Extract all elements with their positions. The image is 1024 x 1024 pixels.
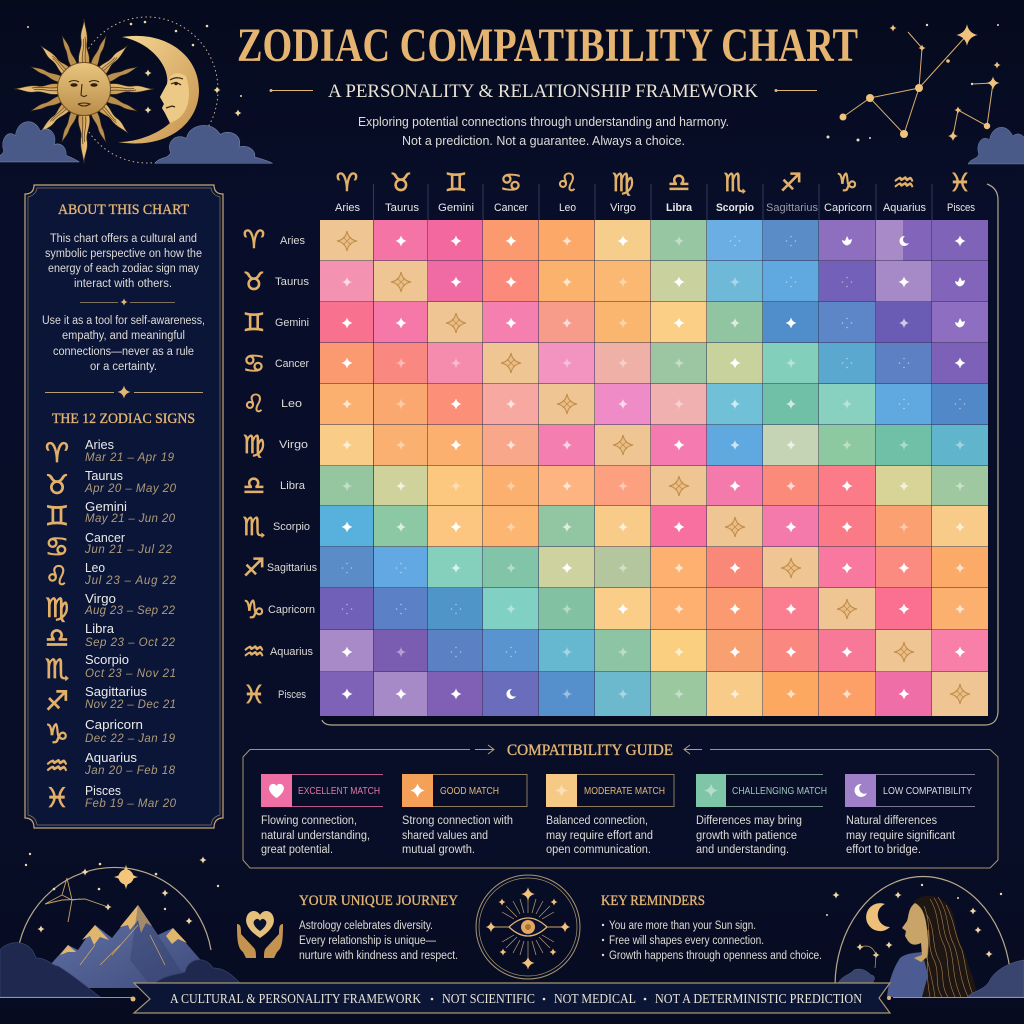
icon: hands holding heart	[237, 911, 283, 958]
sign list	[45, 438, 177, 814]
row headers: ♌︎	[243, 389, 265, 418]
row: Gemini	[320, 302, 988, 342]
row headers: Sagittarius	[267, 562, 317, 574]
legend: low compatibility: LOW COMPATIBILITY	[883, 786, 972, 797]
row headers: Aquarius	[270, 646, 313, 658]
column headers: ♍︎	[612, 168, 634, 197]
hair	[913, 896, 977, 997]
row: Libra	[320, 466, 988, 506]
row: Virgo	[320, 425, 988, 466]
text block: about: symbolic perspective on how the	[45, 248, 202, 260]
row headers: Virgo	[279, 439, 308, 451]
text block: reminders: You are more than your Sun sign.	[609, 920, 756, 932]
column headers: Capricorn	[824, 202, 872, 214]
illustration: constellation	[826, 24, 1001, 141]
column headers: ♑︎	[836, 168, 858, 197]
column headers: Libra	[666, 202, 693, 214]
sign list: Nov 22 – Dec 21	[85, 699, 176, 711]
sign list: Pisces	[85, 784, 121, 798]
face	[902, 903, 928, 962]
text block: about: energy of each zodiac sign may	[48, 263, 199, 275]
sign list: Gemini	[85, 500, 127, 514]
legend: excellent match: natural understanding,	[261, 830, 370, 842]
text block: journey: Every relationship is unique—	[299, 935, 436, 947]
column headers	[335, 168, 975, 220]
row headers: ♈︎	[243, 225, 265, 254]
column headers: ♏︎	[724, 168, 746, 197]
row headers: ♓︎	[243, 680, 265, 709]
column headers: Gemini	[438, 202, 474, 214]
sign list: Cancer	[85, 531, 125, 545]
sign list: ♏︎	[45, 654, 69, 685]
body	[887, 952, 928, 997]
column headers: Aquarius	[883, 202, 926, 214]
sign list: ♈︎	[45, 438, 69, 469]
row headers: ♑︎	[243, 595, 265, 624]
stars by the moon	[27, 21, 242, 117]
column headers: Scorpio	[716, 202, 754, 214]
sign list: Jul 23 – Aug 22	[84, 575, 177, 587]
legend: good match: Strong connection with	[402, 815, 513, 827]
legend: low compatibility: Natural differences	[846, 815, 937, 827]
row: Aries	[320, 220, 988, 260]
row headers: Pisces	[278, 689, 306, 701]
text block: about: empathy, and meaningful	[62, 330, 185, 342]
text block: about: or a certainty.	[90, 361, 157, 373]
sun star	[114, 865, 138, 889]
panel: about and signs	[25, 185, 223, 828]
banner: A CULTURAL & PERSONALITY FRAMEWORK	[170, 991, 421, 1006]
sign list: ♍︎	[45, 593, 69, 624]
banner line left	[0, 996, 133, 998]
text block: journey: Astrology celebrates diversity.	[299, 920, 433, 932]
sign list: ♓︎	[45, 783, 69, 814]
sign list: ♉︎	[45, 470, 69, 501]
column headers: Aries	[335, 202, 360, 214]
legend: good match: GOOD MATCH	[440, 786, 499, 797]
clouds	[838, 960, 1024, 997]
illustration: mountains	[0, 853, 240, 997]
column headers: Leo	[559, 202, 576, 214]
column headers: Pisces	[947, 202, 975, 214]
sign list: Virgo	[85, 592, 116, 606]
sign list: Aquarius	[85, 751, 137, 765]
column headers: ♓︎	[949, 168, 971, 197]
heading: key reminders: KEY REMINDERS	[601, 893, 705, 909]
legend: good match: mutual growth.	[402, 844, 475, 856]
legend: challenging match: CHALLENGING MATCH	[732, 786, 827, 797]
legend: low compatibility: may require significant	[846, 830, 956, 842]
row headers: ♉︎	[243, 267, 265, 296]
sign list: Jun 21 – Jul 22	[84, 544, 173, 556]
row headers: Taurus	[275, 276, 309, 288]
legend: low compatibility: effort to bridge.	[846, 844, 921, 856]
row headers: ♋︎	[243, 349, 265, 378]
clouds	[0, 943, 240, 997]
sign list: ♒︎	[45, 751, 69, 782]
legend: excellent match: great potential.	[261, 844, 333, 856]
legend: good match	[402, 774, 527, 856]
sign list: Capricorn	[85, 718, 143, 732]
column headers: ♊︎	[445, 168, 467, 197]
sign list: Dec 22 – Jan 19	[85, 733, 176, 745]
text block: about: Use it as a tool for self-awareness,	[42, 315, 205, 327]
legend: challenging match: and understanding.	[696, 844, 789, 856]
legend: challenging match: Differences may bring	[696, 815, 802, 827]
row headers: ♎︎	[243, 471, 265, 500]
legend: moderate match: open communication.	[546, 844, 651, 856]
sign list: Mar 21 – Apr 19	[85, 452, 175, 464]
row headers: Libra	[280, 480, 306, 492]
sign list: ♎︎	[45, 623, 69, 654]
tagline: Exploring potential connections through understanding and harmony.	[358, 114, 729, 129]
banner line right	[893, 996, 1024, 998]
row headers: ♒︎	[243, 637, 265, 666]
legend: moderate match: MODERATE MATCH	[584, 786, 665, 797]
icon: sun	[14, 19, 154, 163]
constellation	[45, 878, 108, 922]
legend: moderate match: may require effort and	[546, 830, 653, 842]
sign list: Apr 20 – May 20	[84, 483, 177, 495]
legend: challenging match	[696, 774, 827, 856]
sign list: Taurus	[85, 469, 123, 483]
heading: the 12 zodiac signs: THE 12 ZODIAC SIGNS	[52, 411, 195, 427]
text block: journey	[299, 920, 458, 962]
row headers: ♊︎	[243, 308, 265, 337]
sign list: ♋︎	[45, 532, 69, 563]
column headers: ♋︎	[500, 168, 522, 197]
illustration: sun and moon	[14, 17, 242, 163]
legend: excellent match	[261, 774, 383, 856]
icon: crescent moon	[118, 36, 199, 143]
icon: eye emblem	[476, 875, 580, 979]
text block: about: interact with others.	[74, 278, 172, 290]
banner: NOT SCIENTIFIC	[442, 991, 535, 1006]
legend: moderate match: Balanced connection,	[546, 815, 648, 827]
row: Pisces	[320, 672, 988, 716]
row: Taurus	[320, 261, 988, 302]
text block: about	[42, 233, 205, 398]
column headers: Cancer	[494, 202, 528, 214]
sign list: Oct 23 – Nov 21	[85, 668, 176, 680]
sign list: Libra	[85, 622, 114, 636]
illustration: woman and moon	[826, 876, 1024, 997]
sign list: Feb 19 – Mar 20	[85, 798, 177, 810]
sign list: Sagittarius	[85, 685, 147, 699]
cloud centre	[155, 125, 273, 163]
column headers: Virgo	[610, 202, 636, 214]
row: Capricorn	[320, 588, 988, 630]
row headers: Leo	[281, 398, 302, 410]
row headers: Scorpio	[273, 521, 310, 533]
tagline: Not a prediction. Not a guarantee. Always a choice.	[402, 133, 685, 148]
column headers: ♐︎	[780, 168, 802, 197]
sign list: Jan 20 – Feb 18	[84, 765, 176, 777]
sign list: Aug 23 – Sep 22	[84, 605, 176, 617]
row headers: Cancer	[275, 358, 309, 370]
row: Leo	[320, 384, 988, 424]
text block: about: This chart offers a cultural and	[50, 233, 197, 245]
sign list: ♑︎	[45, 719, 69, 750]
legend: excellent match: Flowing connection,	[261, 815, 357, 827]
column headers: Taurus	[385, 202, 419, 214]
heading: compatibility guide: COMPATIBILITY GUIDE	[507, 742, 673, 759]
row: Scorpio	[320, 506, 988, 546]
sign list: Aries	[85, 438, 114, 452]
text block: reminders	[602, 920, 822, 962]
row headers: Aries	[280, 235, 305, 247]
legend: moderate match	[546, 774, 674, 856]
cloud right	[968, 127, 1024, 164]
text block: journey: nurture with kindness and respect.	[299, 950, 458, 962]
column headers: Sagittarius	[766, 202, 818, 214]
cloud left	[0, 122, 79, 162]
text block: about: connections—never as a rule	[53, 346, 194, 358]
column headers: ♈︎	[336, 168, 358, 197]
row headers	[243, 225, 317, 709]
sign list: Scorpio	[85, 653, 129, 667]
column headers: ♒︎	[893, 168, 915, 197]
row headers: ♍︎	[243, 430, 265, 459]
title: ZODIAC COMPATIBILITY CHART	[237, 19, 858, 72]
legend: low compatibility	[845, 774, 975, 856]
sign list: ♐︎	[45, 686, 69, 717]
row: Sagittarius	[320, 547, 988, 588]
row headers: ♐︎	[243, 553, 265, 582]
sign list: May 21 – Jun 20	[85, 513, 176, 525]
row headers: ♏︎	[243, 512, 265, 541]
legend: challenging match: growth with patience	[696, 830, 797, 842]
heading: your unique journey: YOUR UNIQUE JOURNEY	[299, 893, 458, 909]
row headers: Capricorn	[268, 604, 315, 616]
row: Aquarius	[320, 630, 988, 672]
row: Cancer	[320, 343, 988, 384]
column headers: ♉︎	[390, 168, 412, 197]
legend: good match: shared values and	[402, 830, 488, 842]
column headers: ♌︎	[556, 168, 578, 197]
sign list: Sep 23 – Oct 22	[85, 637, 176, 649]
sign list: ♊︎	[45, 501, 69, 532]
panel: compatibility guide	[243, 742, 998, 868]
tagline	[358, 114, 729, 148]
row headers: Gemini	[275, 317, 309, 329]
banner: NOT MEDICAL	[554, 991, 636, 1006]
compatibility matrix	[320, 220, 988, 716]
subtitle: A PERSONALITY & RELATIONSHIP FRAMEWORK	[328, 81, 758, 102]
text block: reminders: Growth happens through openness and choice.	[609, 950, 822, 962]
heading: about this chart: ABOUT THIS CHART	[58, 202, 189, 218]
banner	[130, 983, 891, 1013]
banner: NOT A DETERMINISTIC PREDICTION	[655, 991, 862, 1006]
legend: excellent match: EXCELLENT MATCH	[298, 786, 380, 797]
crescent	[866, 903, 890, 931]
column headers: ♎︎	[668, 168, 690, 197]
chart frame	[320, 716, 988, 725]
text block: reminders: Free will shapes every connection.	[609, 935, 764, 947]
sign list: Leo	[85, 561, 105, 575]
sign list: ♌︎	[45, 561, 69, 592]
